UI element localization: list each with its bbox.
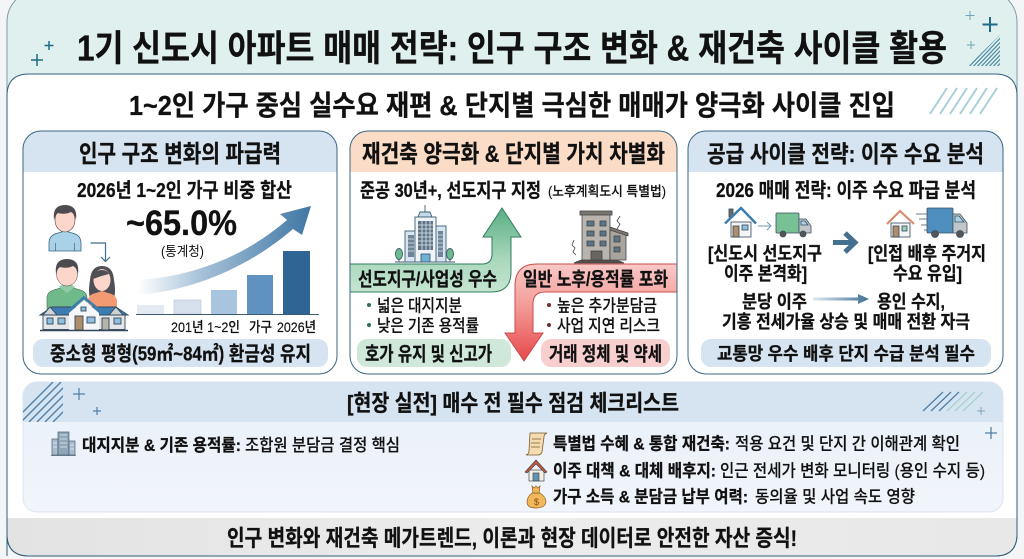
takeaway pill xyxy=(701,339,991,367)
red result pill xyxy=(541,339,670,367)
decorative hatch beside subtitle xyxy=(930,88,997,114)
item: land share: 대지지분 & 기존 용적률: xyxy=(82,436,241,455)
icon: house blue roof xyxy=(725,208,756,237)
item: land share: 조합원 분담금 결정 핵심 xyxy=(245,436,400,455)
panel header band xyxy=(688,131,1003,172)
red bullet list: 사업 지연 리스크 xyxy=(557,316,660,336)
ripple text left: 분당 이주 xyxy=(742,292,807,312)
stat value: ~65.0% xyxy=(126,204,237,243)
green result pill: 호가 유지 및 신고가 xyxy=(365,344,492,366)
panel: reconstruction polarization xyxy=(350,131,677,374)
item: land share xyxy=(51,432,400,456)
right stage label: 수요 유입] xyxy=(893,263,962,284)
item: income: $ xyxy=(534,497,539,507)
panel heading: 공급 사이클 전략: 이주 수요 분석 xyxy=(707,141,984,167)
stat caption: 2026년 1~2인 가구 비중 합산 xyxy=(77,179,292,202)
big arrow between stages xyxy=(833,233,855,252)
icon: green truck xyxy=(776,213,811,237)
red band label: 일반 노후/용적률 포화 xyxy=(523,268,668,290)
left stage label: 이주 본격화] xyxy=(724,263,807,284)
item: special act: 적용 요건 및 단지 간 이해관계 확인 xyxy=(735,434,960,454)
left stage label: [신도시 선도지구 xyxy=(708,243,822,264)
gradient arrow xyxy=(813,294,869,304)
panel: population structure xyxy=(23,131,337,374)
chart axis labels xyxy=(171,319,316,335)
subtitle: 1~2인 가구 중심 실수요 재편 & 단지별 극심한 매매가 양극화 사이클 진입 xyxy=(129,90,895,121)
checklist header band xyxy=(23,382,1003,422)
panel: supply cycle xyxy=(688,131,1003,374)
green band label: 선도지구/사업성 우수 xyxy=(358,268,497,290)
panel header band xyxy=(23,131,337,172)
icon: house xyxy=(525,460,547,481)
icon: money bag xyxy=(527,486,546,508)
panel subheading: (노후계획도시 특별법) xyxy=(548,184,666,199)
decorative hatch and plus marks right xyxy=(923,392,997,439)
left stage label xyxy=(708,243,822,284)
icon: aging building xyxy=(572,211,628,263)
item: income xyxy=(527,486,915,508)
item: special act xyxy=(526,433,960,455)
icon: house orange roof xyxy=(887,211,914,237)
red bullet list: 높은 추가분담금 xyxy=(557,296,657,316)
icon: couple with houses xyxy=(40,259,128,330)
decorative sparkles, top left xyxy=(31,41,54,66)
arrow: single person to household xyxy=(90,243,110,262)
icon: office building xyxy=(51,432,76,456)
item: income: 동의율 및 사업 속도 영향 xyxy=(755,488,915,506)
stat source: (통계청) xyxy=(161,244,204,259)
decorative sparkles and hatch, top right xyxy=(966,11,1000,66)
panel heading: 재건축 양극화 & 단지별 가치 차별화 xyxy=(362,141,665,168)
panel heading: 인구 구조 변화의 파급력 xyxy=(79,141,281,168)
icon: new towers xyxy=(395,205,455,262)
chart axis labels: 2026년 xyxy=(277,319,316,335)
icon: blue truck with motion lines xyxy=(916,208,967,238)
chart axis labels: 201년 1~2인 xyxy=(171,319,240,335)
red down arrow band xyxy=(505,264,677,361)
right stage label xyxy=(868,243,986,284)
panel subheading: 2026 매매 전략: 이주 수요 파급 분석 xyxy=(716,179,976,202)
green result pill xyxy=(357,339,511,367)
red result pill: 거래 정체 및 약세 xyxy=(549,344,662,366)
panel header band xyxy=(350,131,677,172)
ripple text line two: 기흥 전세가율 상승 및 매매 전환 자극 xyxy=(722,312,970,332)
item: special act: 특별법 수혜 & 통합 재건축: xyxy=(553,434,730,454)
arrow: small move xyxy=(758,222,771,230)
decorative plus marks left xyxy=(73,388,101,415)
bar chart xyxy=(136,251,319,314)
ripple text right: 용인 수지, xyxy=(877,292,945,312)
footer band xyxy=(7,518,1017,556)
row of houses xyxy=(40,298,128,330)
item: relocation: 이주 대책 & 대체 배후지: xyxy=(553,462,716,480)
takeaway pill: 교통망 우수 배후 단지 수급 분석 필수 xyxy=(717,344,975,364)
icon: single person xyxy=(49,205,81,251)
green bullet list: 낮은 기존 용적률 xyxy=(377,316,479,336)
item: relocation xyxy=(525,460,985,481)
item: relocation: 인근 전세가 변화 모니터링 (용인 수지 등) xyxy=(720,462,985,480)
right stage label: [인접 배후 주거지 xyxy=(868,243,986,264)
green bullet list xyxy=(367,296,479,336)
footer message: 인구 변화와 재건축 메가트렌드, 이론과 현장 데이터로 안전한 자산 증식! xyxy=(227,526,797,551)
panel subheading: 준공 30년+, 선도지구 지정 xyxy=(360,180,541,202)
growth arrow xyxy=(138,206,311,295)
checklist heading: [현장 실전] 매수 전 필수 점검 체크리스트 xyxy=(347,391,679,416)
chart axis labels: 가구 xyxy=(249,319,272,335)
green up arrow band xyxy=(350,208,521,292)
decorative hatch left xyxy=(23,382,63,422)
takeaway pill: 중소형 평형(59㎡~84㎡) 환금성 유지 xyxy=(50,342,311,366)
panel: field checklist xyxy=(13,382,1003,512)
icon: scroll xyxy=(526,433,547,455)
item: income: 가구 소득 & 분담금 납부 여력: xyxy=(553,488,748,506)
green bullet list: 넓은 대지지분 xyxy=(377,296,462,316)
red bullet list xyxy=(547,296,660,336)
takeaway pill xyxy=(33,339,328,367)
